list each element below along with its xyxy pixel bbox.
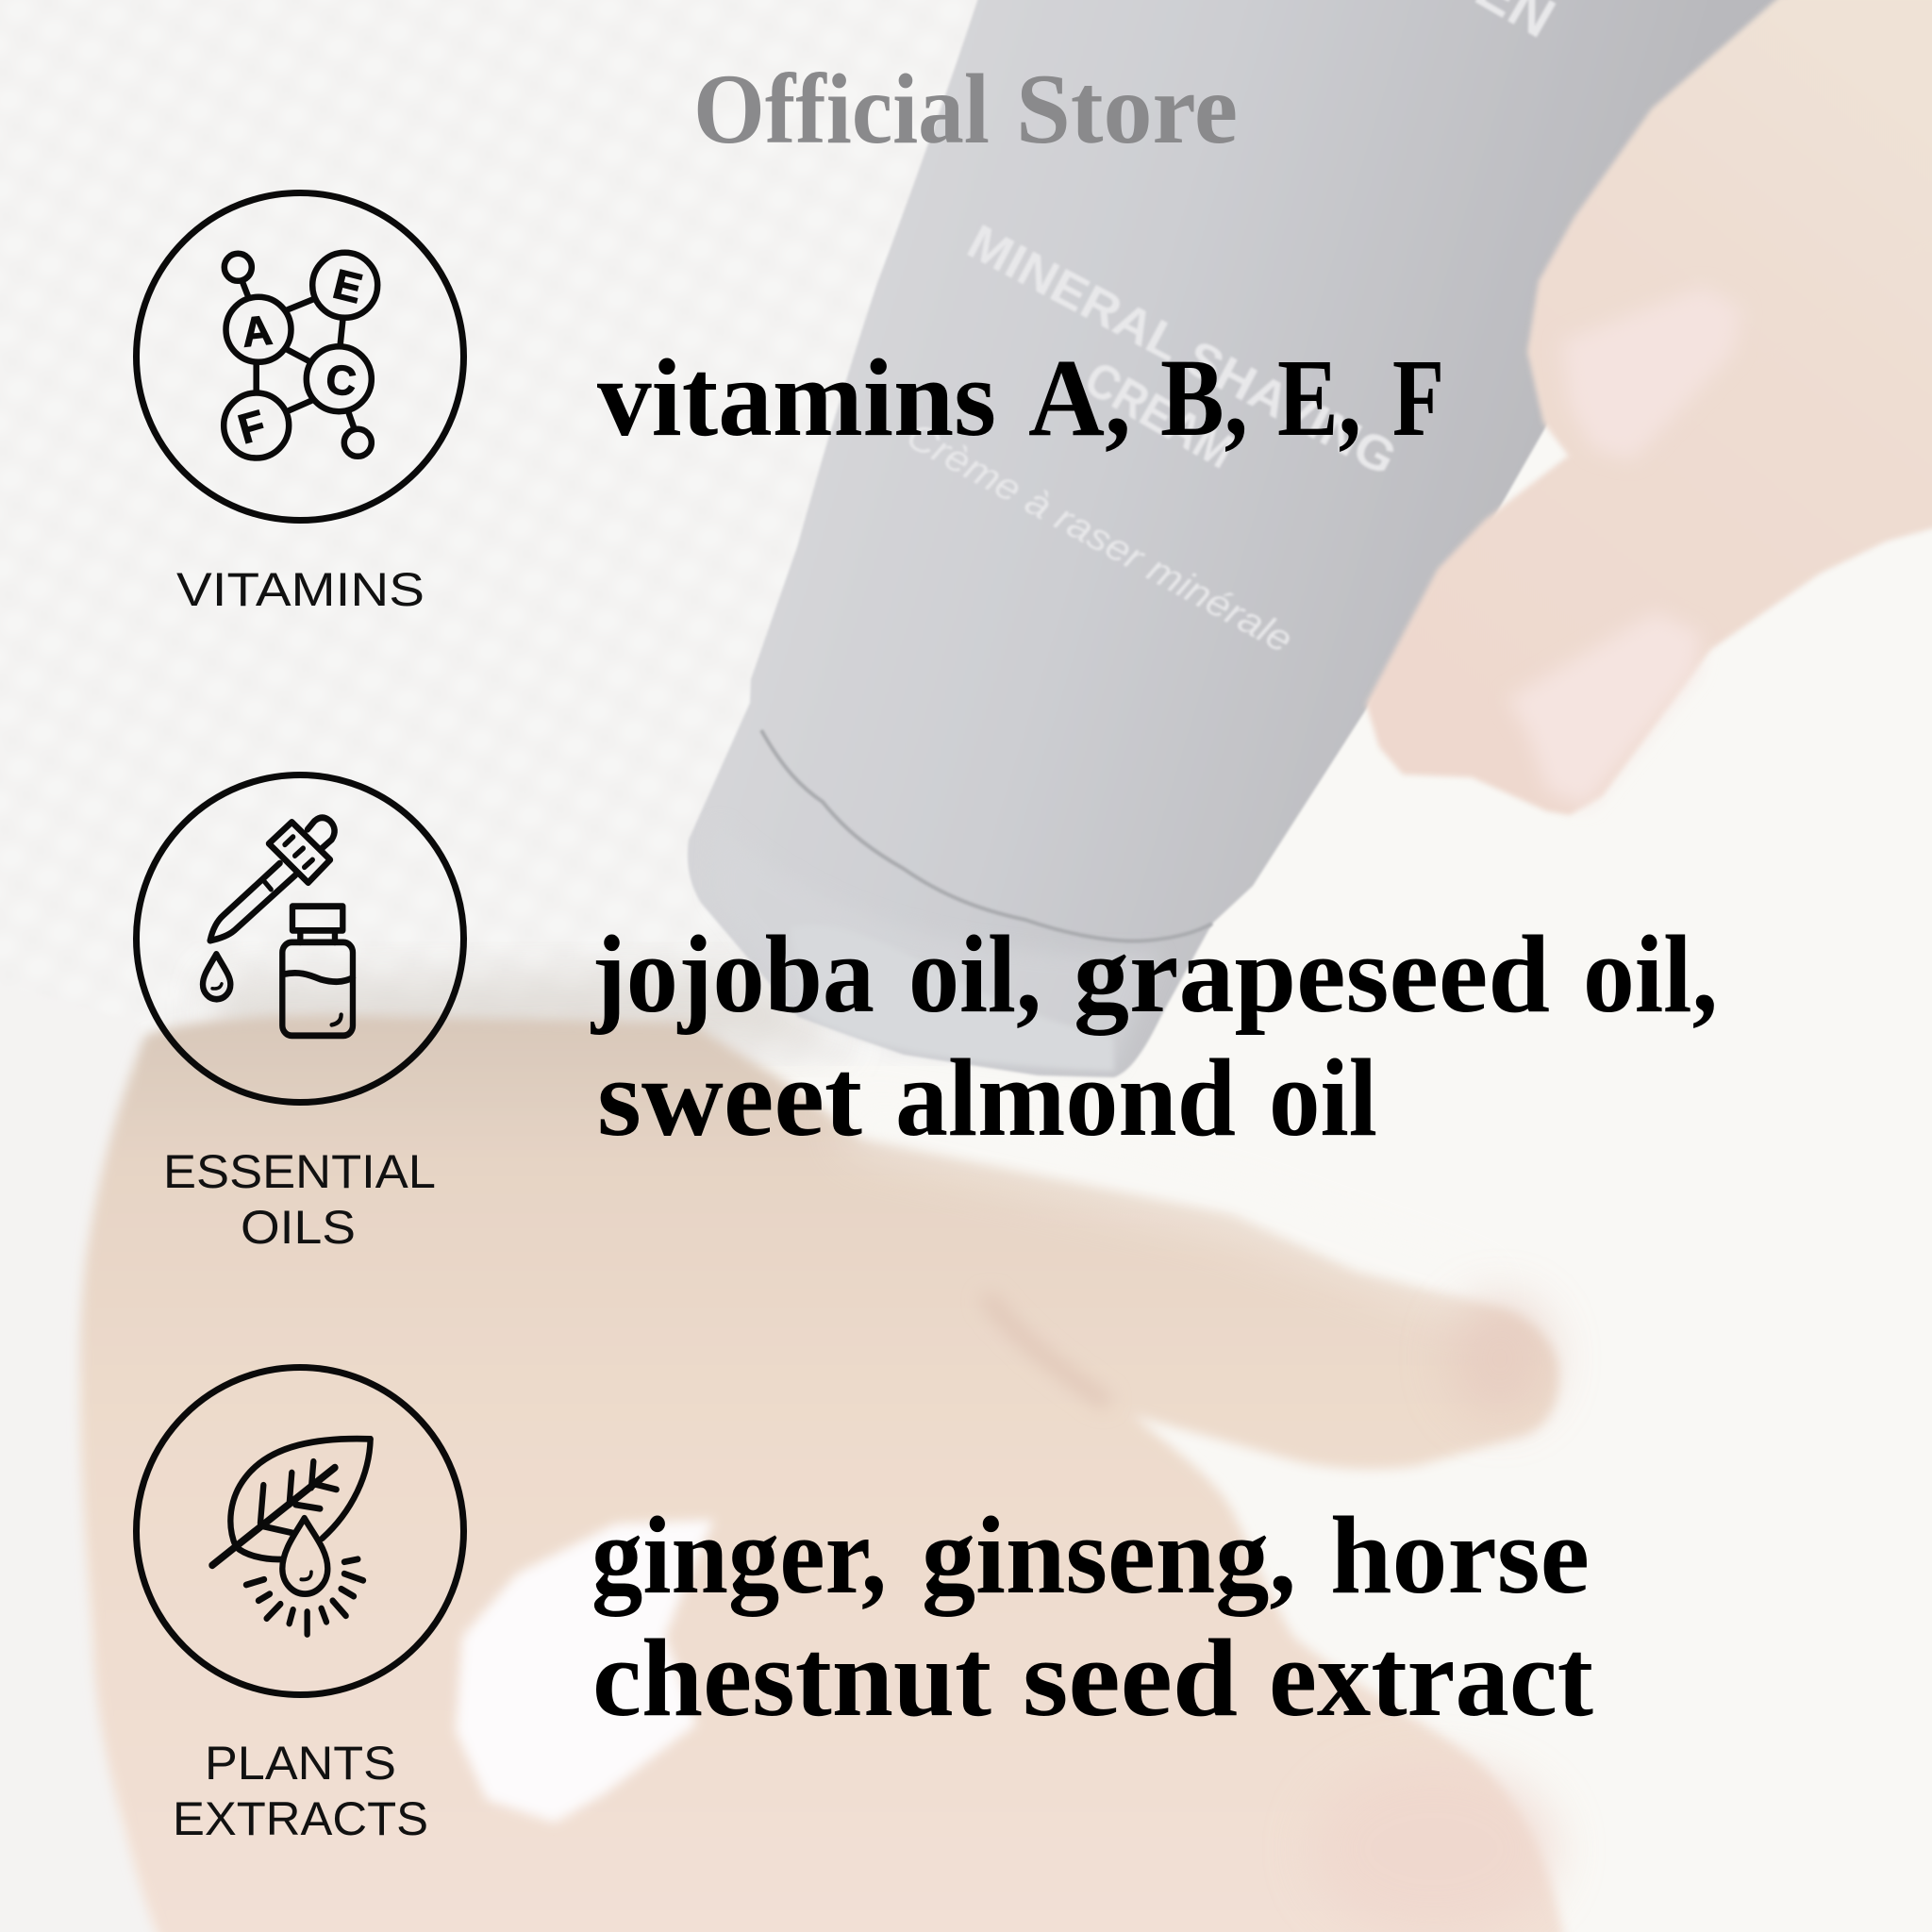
title: Official Store: Store [1016,54,1238,164]
text: vitamins list: E, [1277,336,1361,459]
text: plant extracts list: chestnut [592,1616,991,1740]
text: oils list: almond [895,1036,1236,1159]
row: plant extracts [136,1368,1593,1845]
tube label [900,0,1565,661]
text: oils list: oil [1269,1036,1377,1159]
knit sweater [0,0,1132,1066]
label: ESSENTIAL OILS [163,1145,436,1254]
title: Official Store [693,54,1238,164]
icon: vitamin molecules in circle: A [240,308,275,357]
white sleeve [0,981,160,1932]
tube with cap [688,0,1792,1077]
row: essential oils [136,775,1718,1254]
text: oils list: oil, [908,912,1041,1036]
text: plant extracts list: horse [1330,1493,1590,1617]
pale fuzzy hand edge [849,1123,1491,1302]
finger crease [986,1296,1108,1404]
lower finger [1366,226,1932,815]
tube label: Crème à raser minérale [900,414,1299,661]
hand with finger [80,1015,1565,1932]
label: ESSENTIAL OILS: OILS [241,1201,356,1254]
icon: vitamin molecules in circle: E [328,261,367,312]
tube label: MINERAL SHAVING [958,214,1405,487]
text: oils list: sweet [597,1036,862,1159]
lighter cap area [712,821,1160,1071]
tube label: CREAM [1075,351,1243,479]
cap nozzle [791,925,1114,1071]
text: oils list: jojoba [591,912,874,1036]
icon: vitamin molecules in circle: C [324,357,358,406]
row: vitamins [136,192,1444,616]
text: plant extracts list [591,1493,1593,1740]
upper finger nail [1562,287,1741,460]
text: oils list [591,912,1718,1159]
text: plant extracts list: extract [1269,1616,1593,1740]
text: vitamins list [597,336,1444,459]
text: plant extracts list: ginseng, [922,1493,1296,1617]
icon: vitamin molecules in circle [136,192,464,521]
title: Official Store: Official [693,54,990,164]
text: vitamins list: vitamins [597,336,996,459]
icon: vitamin molecules in circle: F [233,402,271,453]
text: vitamins list: A, [1028,336,1131,459]
label: VITAMINS: VITAMINS [176,563,425,616]
cream blob [456,1520,714,1823]
text: oils list: oil, [1583,912,1718,1036]
lower finger nail [1507,612,1701,807]
icon: dropper and bottle in circle [136,775,464,1102]
icon: leaf and drop in circle [136,1368,464,1694]
label: PLANTS EXTRACTS: EXTRACTS [173,1792,428,1845]
text: plant extracts list: seed [1023,1616,1238,1740]
fingertip shading [1311,1297,1557,1932]
upper finger [1527,0,1932,474]
cap seam [761,730,1212,941]
text: vitamins list: B, [1160,336,1248,459]
label: ESSENTIAL OILS: ESSENTIAL [163,1145,436,1198]
text: vitamins list: F [1392,336,1444,459]
label: PLANTS EXTRACTS: PLANTS [205,1737,396,1790]
label: PLANTS EXTRACTS [173,1737,428,1845]
text: oils list: grapeseed [1074,912,1550,1036]
text: plant extracts list: ginger, [591,1493,887,1617]
